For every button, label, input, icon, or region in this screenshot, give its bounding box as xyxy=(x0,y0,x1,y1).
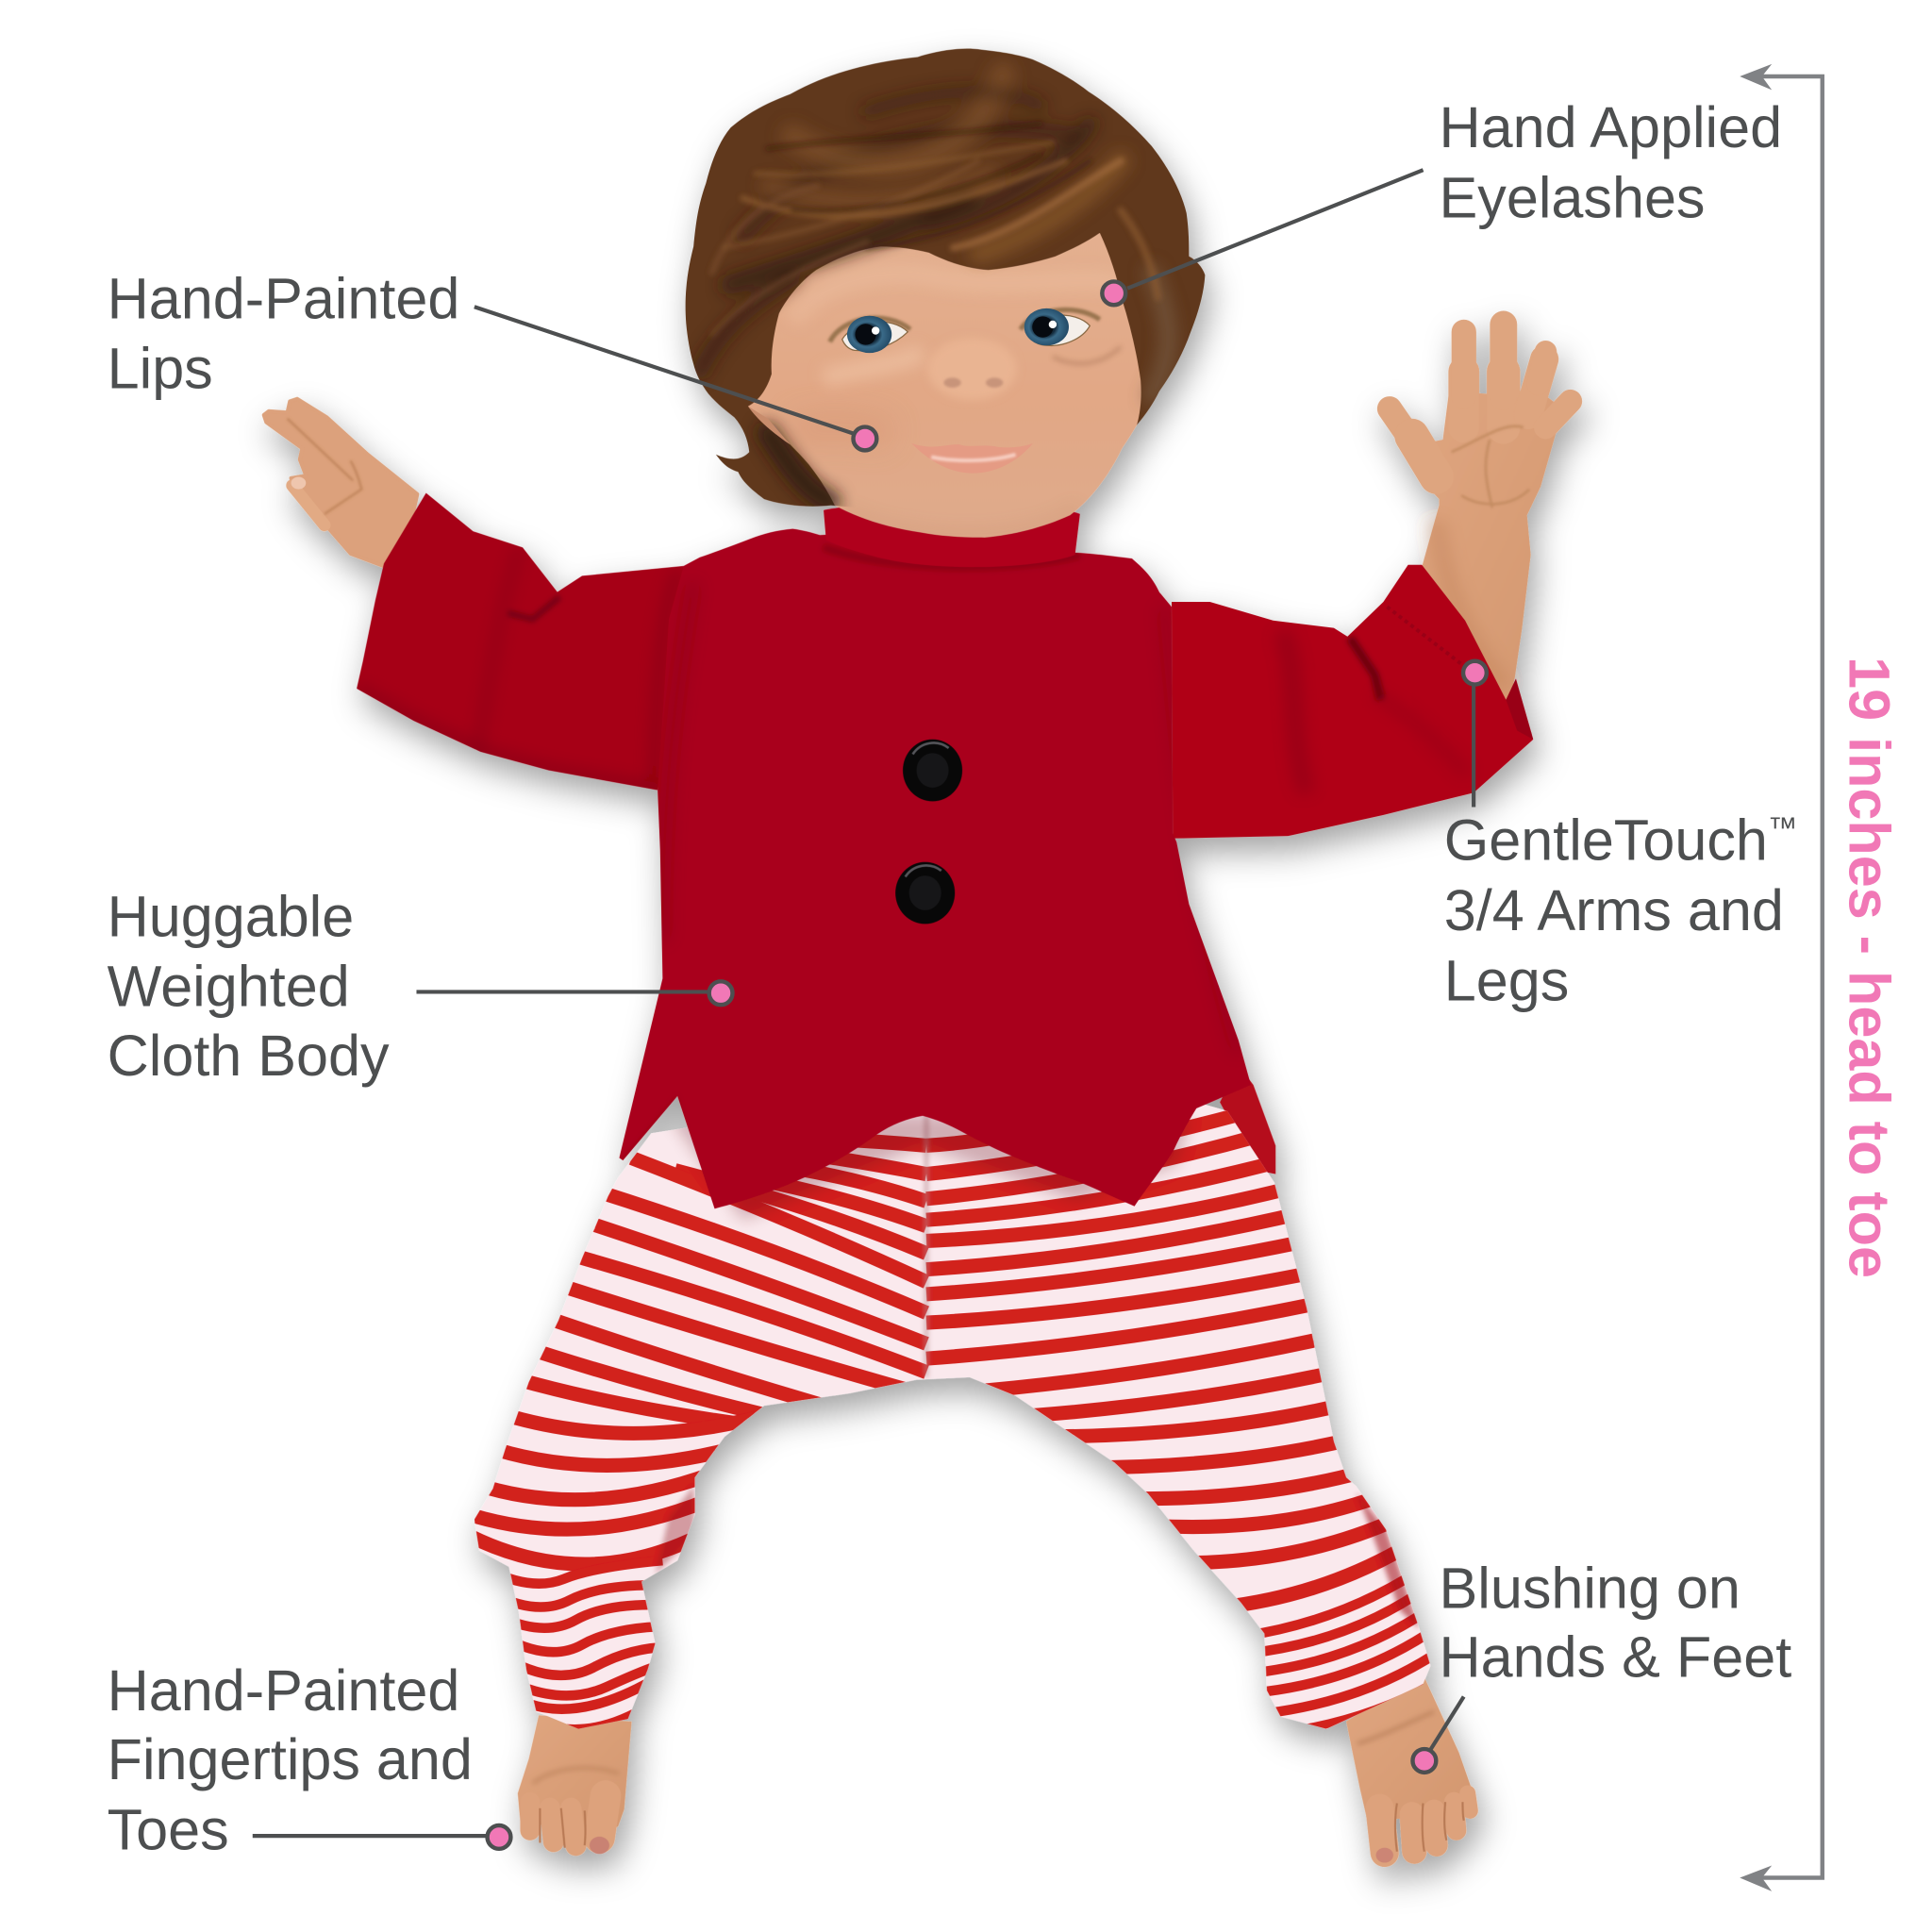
left ankle stripes xyxy=(509,1558,663,1729)
label: Hands & Feet xyxy=(1440,1625,1791,1690)
marker dot xyxy=(1412,1749,1436,1773)
leader line xyxy=(1127,170,1424,289)
doll photo illustration xyxy=(264,49,1571,1862)
left eye xyxy=(830,316,910,353)
hair strands xyxy=(700,75,1168,502)
turtleneck collar xyxy=(824,504,1080,567)
striped pants xyxy=(464,1090,1449,1731)
label: Legs xyxy=(1444,949,1569,1013)
right ankle stripes xyxy=(1260,1575,1430,1729)
marker dot xyxy=(1102,281,1125,305)
button 1 xyxy=(903,740,962,801)
label: Hand-Painted xyxy=(108,267,459,331)
leader line xyxy=(1473,684,1475,808)
leader line xyxy=(253,1835,488,1838)
label: Eyelashes xyxy=(1440,166,1706,230)
face xyxy=(748,233,1141,538)
right arm and hand xyxy=(1390,325,1571,712)
marker dot xyxy=(488,1825,510,1849)
top arrowhead xyxy=(1740,64,1772,90)
label: Weighted xyxy=(108,954,350,1018)
shirt body xyxy=(619,529,1251,1208)
label: ™ xyxy=(1768,811,1797,844)
doll body with drop shadow xyxy=(264,49,1571,1862)
left sleeve xyxy=(347,483,718,805)
face details xyxy=(748,269,1122,474)
label: Cloth Body xyxy=(108,1024,390,1088)
label: Fingertips and xyxy=(108,1727,473,1791)
label: Toes xyxy=(108,1797,229,1861)
label: Hand Applied xyxy=(1440,95,1782,159)
leader line xyxy=(475,307,854,434)
fine strands xyxy=(712,124,1158,334)
leader line xyxy=(416,991,709,993)
leader line xyxy=(1430,1697,1464,1750)
button 2 xyxy=(895,862,955,924)
bottom arrowhead xyxy=(1740,1865,1772,1891)
lips xyxy=(911,443,1033,474)
left thigh stripes xyxy=(464,1137,941,1564)
marker dot xyxy=(1463,661,1487,685)
label: Lips xyxy=(108,336,213,400)
left hand xyxy=(264,399,417,567)
callout: hand-painted lips xyxy=(108,267,876,450)
hair xyxy=(686,49,1205,520)
callout: weighted cloth body xyxy=(108,885,732,1088)
callout: fingertips and toes xyxy=(108,1658,510,1861)
shirt back flap xyxy=(1220,1065,1275,1174)
vertical height label: 19 inches - head to toe xyxy=(1837,657,1901,1278)
marker dot xyxy=(709,981,732,1005)
nose xyxy=(927,338,1017,400)
face shading xyxy=(748,269,1122,444)
right eye xyxy=(1021,308,1100,345)
label: GentleTouch xyxy=(1444,808,1797,873)
label: Blushing on xyxy=(1440,1556,1740,1620)
label: Huggable xyxy=(108,885,354,949)
shading on pants xyxy=(650,1115,1419,1628)
label: Hand-Painted xyxy=(108,1658,459,1723)
callout: gentletouch arms and legs xyxy=(1444,661,1797,1013)
marker dot xyxy=(853,427,876,450)
label: 3/4 Arms and xyxy=(1444,878,1784,942)
callout: blushing on hands and feet xyxy=(1412,1556,1791,1773)
right sleeve xyxy=(1164,558,1548,855)
right foot xyxy=(1346,1674,1477,1862)
callout: hand applied eyelashes xyxy=(1102,95,1782,305)
right thigh stripes xyxy=(926,1115,1424,1607)
height bracket with arrows xyxy=(1740,64,1823,1891)
left foot xyxy=(518,1715,632,1854)
soft dark and light masses xyxy=(700,75,1168,502)
